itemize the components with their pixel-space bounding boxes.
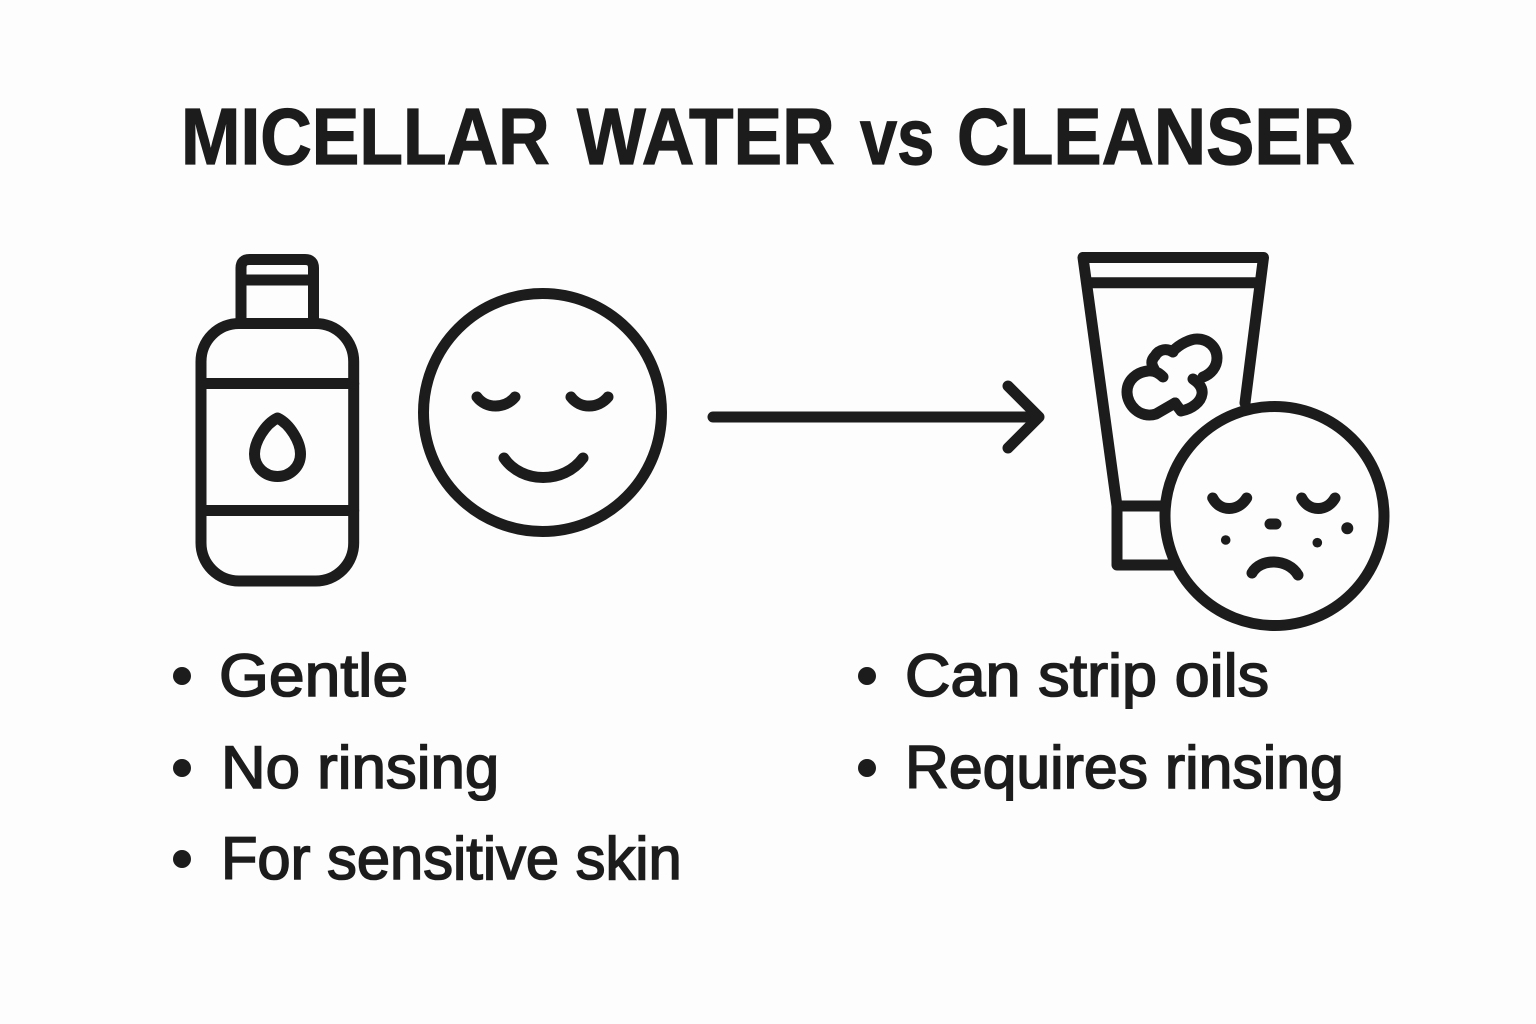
bullet item: Can strip oils [905, 642, 1269, 709]
title: WATER [577, 92, 835, 181]
title [181, 92, 1355, 181]
bullet item: Requires rinsing [905, 734, 1344, 801]
title: vs [860, 92, 934, 181]
title: MICELLAR [181, 92, 550, 181]
bullet item: No rinsing [221, 734, 499, 801]
bullet list: micellar water [173, 642, 682, 892]
icon: cleanser tube [1083, 258, 1264, 565]
arrow [713, 386, 1039, 448]
bullet item: For sensitive skin [221, 825, 682, 892]
bullet item: Gentle [219, 642, 408, 709]
title: CLEANSER [957, 92, 1355, 181]
icon: irritated face [1165, 406, 1384, 626]
icon: micellar water bottle [201, 260, 354, 581]
icon: happy face [424, 294, 662, 532]
bullet list: cleanser [858, 642, 1344, 801]
